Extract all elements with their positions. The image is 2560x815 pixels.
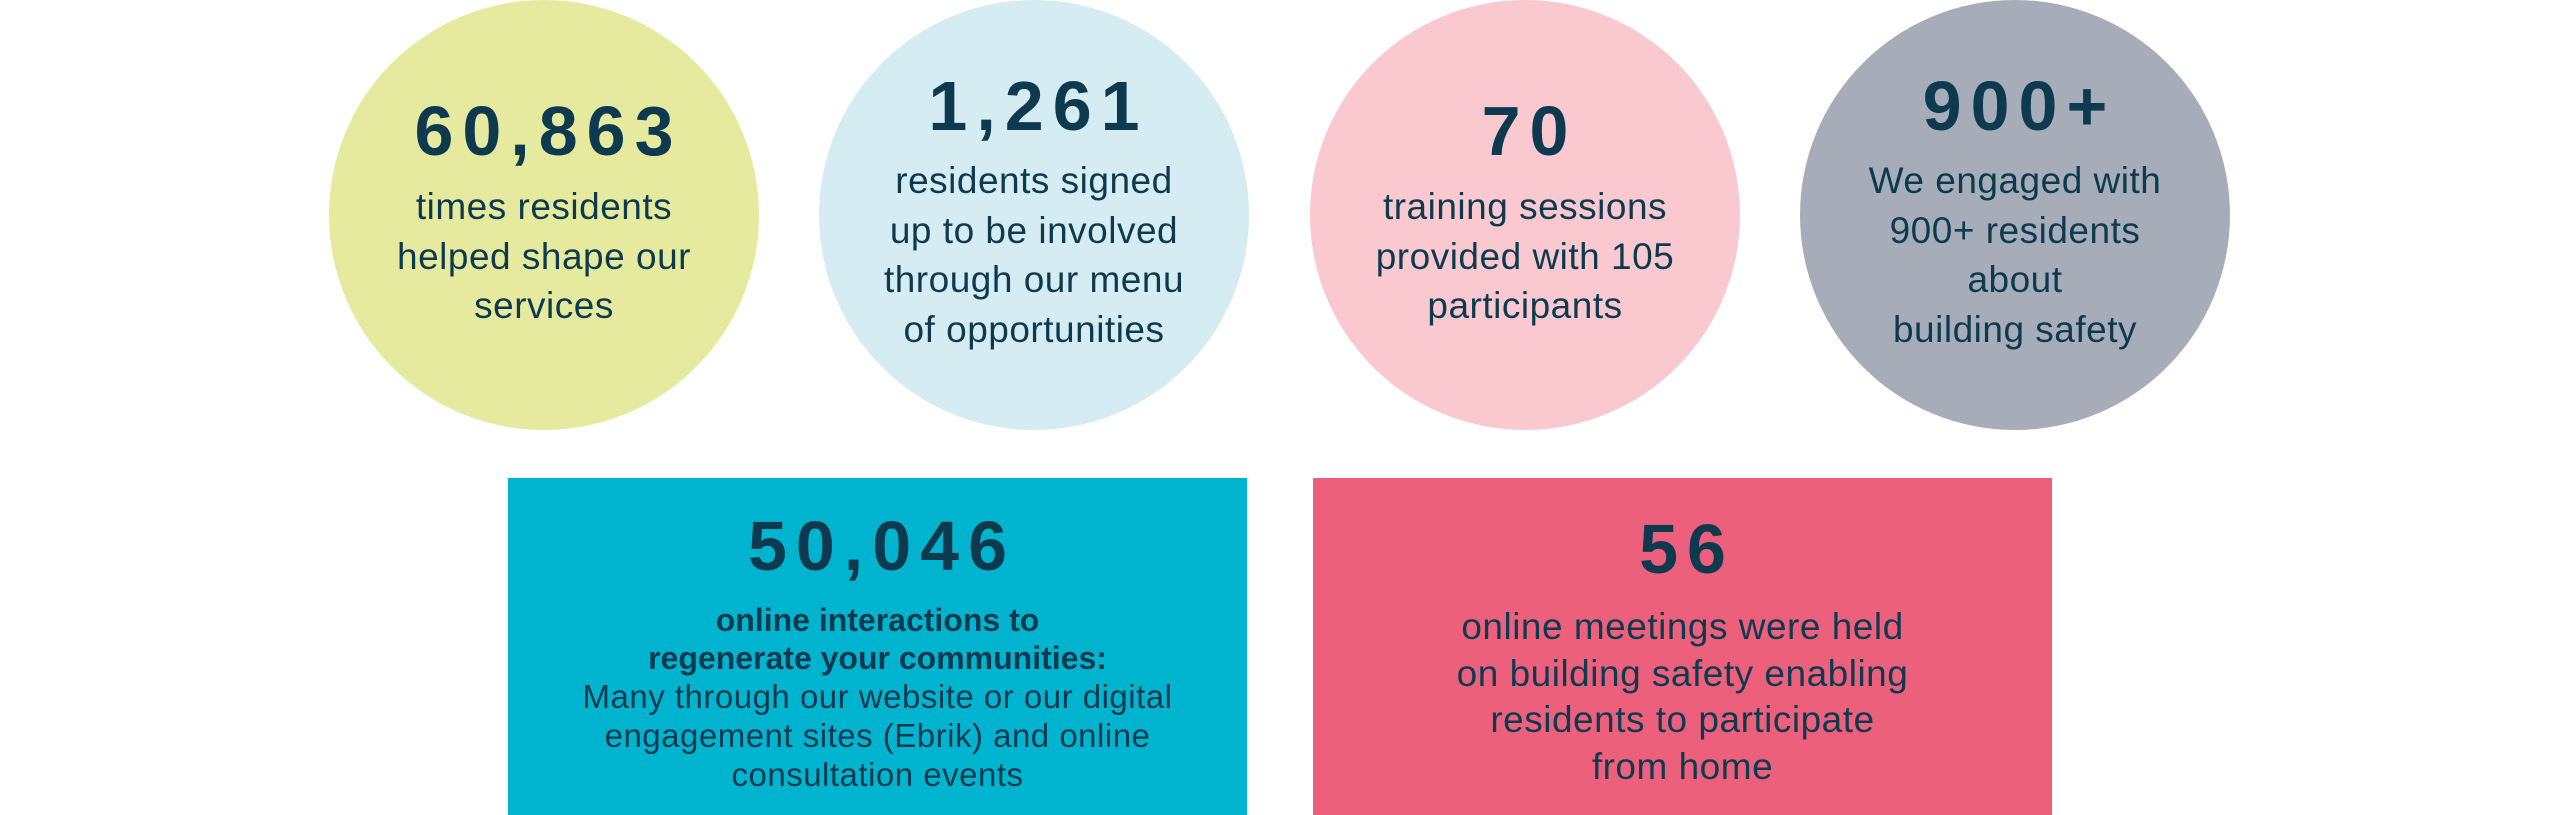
description: consultation events <box>731 756 1024 793</box>
description: of opportunities <box>903 308 1164 350</box>
description: through our menu <box>884 259 1184 300</box>
description: training sessions <box>1383 186 1667 227</box>
description: We engaged with <box>1869 160 2161 201</box>
description: residents signed <box>895 160 1173 201</box>
description: residents to participate <box>1490 699 1875 740</box>
description: times residents <box>416 186 672 227</box>
description <box>1868 160 2161 350</box>
circle: 60,863 <box>329 0 759 430</box>
number: 56 <box>1639 510 1735 588</box>
description <box>884 160 1184 350</box>
number: 900+ <box>1923 67 2116 145</box>
description: services <box>474 285 614 326</box>
circle: 1,261 <box>819 0 1249 430</box>
number: 70 <box>1482 92 1577 170</box>
description: engagement sites (Ebrik) and online <box>605 717 1150 754</box>
circle: 900+ <box>1800 0 2230 430</box>
description: provided with 105 <box>1376 236 1674 276</box>
box: 50,046 online interactions <box>508 478 1247 815</box>
number: 1,261 <box>928 67 1149 145</box>
description: building safety <box>1893 308 2137 350</box>
circle: 70 <box>1310 0 1740 430</box>
description: online meetings were held <box>1461 606 1904 647</box>
description: from home <box>1592 746 1773 786</box>
box: 56 online meetings <box>1313 478 2052 815</box>
bold heading <box>648 602 1107 676</box>
description: up to be involved <box>890 210 1178 250</box>
number: 60,863 <box>414 92 683 170</box>
description: about <box>1967 259 2063 300</box>
bold heading: regenerate your communities: <box>648 640 1107 676</box>
description <box>397 186 691 326</box>
description <box>1457 606 1908 786</box>
description: 900+ residents <box>1890 210 2140 250</box>
description: Many through our website or our digital <box>582 678 1172 715</box>
description: participants <box>1427 285 1623 326</box>
description <box>1376 186 1674 326</box>
description: on building safety enabling <box>1457 652 1908 694</box>
description: helped shape our <box>397 236 691 276</box>
number: 50,046 <box>748 507 1016 585</box>
bold heading: online interactions to <box>716 602 1039 638</box>
description <box>582 678 1172 793</box>
